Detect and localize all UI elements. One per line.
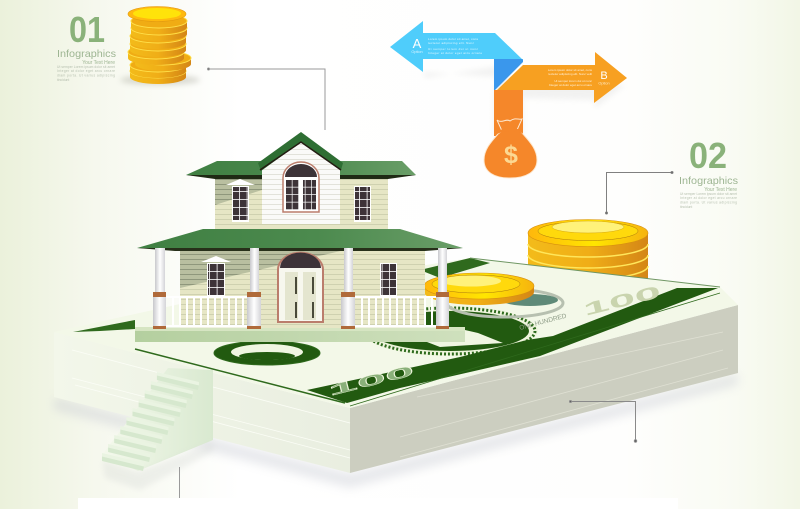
arrow A: Lorem ipsum dolor sit amet, cons xyxy=(428,37,478,41)
money bag icon xyxy=(484,119,537,178)
label block 02 xyxy=(679,135,738,209)
label block 01: tincidunt xyxy=(57,78,69,82)
arrow B: Ut semper lorem dui ut nunc xyxy=(554,79,592,83)
arrow stem xyxy=(494,90,523,136)
label block 02: Your Text Here xyxy=(704,187,737,193)
arrow A: Integer at dolor eget arcu ornare xyxy=(428,51,482,55)
porch railings xyxy=(166,296,437,328)
arrow B: B xyxy=(600,70,608,82)
fold: dark blue xyxy=(494,59,523,91)
label block 01: diam porta. Ut varius adipiscing xyxy=(57,74,115,78)
label block 02: diam porta. Ut varius adipiscing xyxy=(680,200,737,204)
leader line: stairs xyxy=(178,467,180,498)
money bag icon: $ xyxy=(504,141,518,169)
dormer arched window xyxy=(283,162,319,212)
arrow B: Lorem ipsum dolor sit amet, cons xyxy=(548,68,592,72)
bill faded portrait ring xyxy=(447,289,563,317)
upper roof xyxy=(186,161,416,178)
bill oval seal xyxy=(214,341,320,365)
shadow under stairs xyxy=(102,442,213,490)
upper left window xyxy=(226,179,255,222)
label block 01: Your Text Here xyxy=(82,60,115,66)
bill top surface xyxy=(54,258,738,408)
label block 02: Ut semper Lorem ipsum dolor sit amet xyxy=(680,192,737,196)
dormer gable xyxy=(262,143,340,224)
arrow shadow xyxy=(423,66,625,135)
arrow A: Ut semper lorem dui ut nunc xyxy=(428,47,478,51)
bill border: back xyxy=(73,320,135,332)
coin stack: right, behind money xyxy=(528,220,648,291)
label block 02: tincidunt xyxy=(680,205,692,209)
coin on money xyxy=(424,273,534,305)
arrow A: A xyxy=(413,36,422,51)
leader line: house to 01 xyxy=(208,68,325,130)
lower left window xyxy=(201,256,231,296)
label block 01: 01 xyxy=(69,9,105,50)
shadow under stack xyxy=(54,373,738,488)
label block 02: Infographics xyxy=(679,175,738,187)
bill fine print: ONE HUNDRED xyxy=(519,313,568,332)
label block 02: 02 xyxy=(689,135,727,176)
label block 02: Integer at dolor eget arcu ornare xyxy=(680,196,737,200)
label block 01: Ut semper Lorem ipsum dolor sit amet xyxy=(57,65,115,69)
arrow B: Integer at dolor eget arcu ornare xyxy=(549,83,592,87)
label block 01: Integer at dolor eget arcu ornare xyxy=(57,69,115,73)
lower roof xyxy=(137,229,463,250)
stairs xyxy=(102,368,213,490)
arrow diagram xyxy=(390,21,627,178)
stair steps xyxy=(102,372,199,471)
porch platform xyxy=(135,330,465,342)
stack right face xyxy=(350,305,738,473)
arrow A: Option xyxy=(411,50,423,54)
bill centre seal xyxy=(362,306,538,356)
coin stack: top left xyxy=(120,6,200,85)
arrow B: Option xyxy=(598,82,610,86)
leader line: coins to 02 xyxy=(606,172,673,214)
arrow B xyxy=(497,52,627,103)
label block 01 xyxy=(57,9,116,82)
bill border: front right band xyxy=(307,288,718,403)
house xyxy=(135,132,465,342)
porch columns xyxy=(153,248,449,329)
leader line: money stack xyxy=(570,400,637,442)
arrow A: tectetur adipiscing elit. Nunc xyxy=(428,41,474,45)
lower storey walls xyxy=(180,250,425,328)
upper storey walls xyxy=(215,175,388,229)
label block 01: Infographics xyxy=(57,48,116,60)
arrow B: tectetur adipiscing elit. Nunc velit xyxy=(548,72,592,76)
stack left face xyxy=(54,332,350,473)
lower right window xyxy=(380,263,397,296)
upper right window xyxy=(354,186,371,222)
bill denomination front: 100 xyxy=(327,362,416,399)
arrow A xyxy=(390,21,523,72)
front door xyxy=(278,253,323,322)
stair side wall xyxy=(102,368,213,471)
money stack xyxy=(54,258,738,488)
bill denomination back: 100 xyxy=(581,282,663,320)
